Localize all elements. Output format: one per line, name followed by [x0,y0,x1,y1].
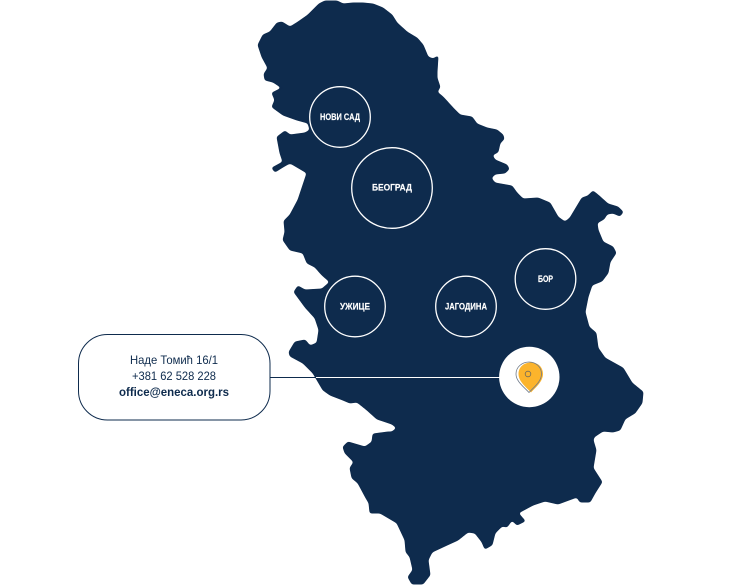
city: Belgrade: БЕОГРАД [372,182,413,192]
city: Uzice [325,276,385,337]
location marker [499,347,560,407]
connector line: left segment [270,376,316,378]
address: Наде Томић 16/1 [130,353,218,367]
email: office@eneca.org.rs [119,385,229,399]
city: Novi Sad: НОВИ САД [320,112,361,122]
phone: +381 62 528 228 [132,369,216,383]
city: Bor: БОР [538,274,553,284]
contact box [78,334,270,420]
map of Serbia [258,1,643,584]
city: Jagodina: ЈАГОДИНА [445,302,488,312]
connector line: right segment [316,376,500,378]
city: Jagodina [436,276,496,337]
city: Uzice: УЖИЦЕ [340,302,370,312]
city: Novi Sad [310,87,370,147]
city: Bor [515,249,576,309]
city: Belgrade [352,148,432,228]
